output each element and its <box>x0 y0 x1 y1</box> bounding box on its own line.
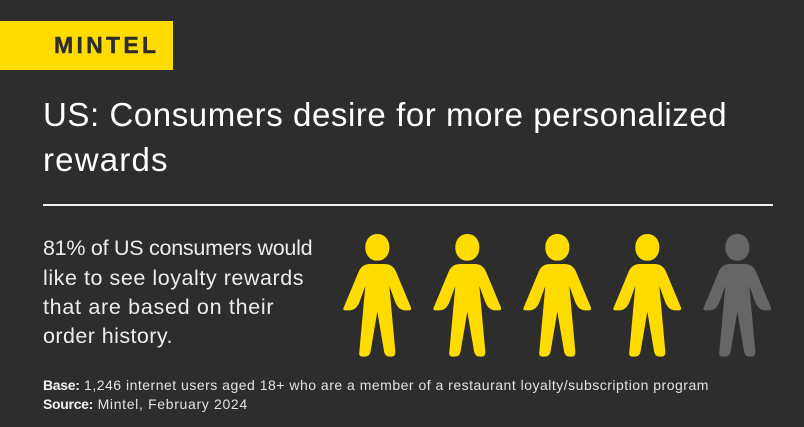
title <box>43 96 727 178</box>
statistic text block: order history. <box>43 324 173 348</box>
title: rewards <box>43 141 169 178</box>
footnote: base and source: Source: Mintel, February 2024 <box>43 396 248 412</box>
statistic text block: like to see loyalty rewards <box>43 266 304 290</box>
statistic text block: that are based on their <box>43 295 274 319</box>
divider line <box>43 204 773 206</box>
icon: person 2 highlighted <box>433 234 501 357</box>
logo wordmark: MINTEL <box>54 32 159 58</box>
icon: person 1 highlighted <box>343 234 411 357</box>
footnote: base and source <box>43 377 709 412</box>
icon: person 5 grey <box>703 234 771 357</box>
footnote: base and source: Base: 1,246 internet users aged 18+ who are a member of a restaurant loyalty/subscription program <box>43 377 709 393</box>
pictogram chart: 4 of 5 people highlighted <box>343 234 772 357</box>
title: US: Consumers desire for more personalized <box>43 96 727 133</box>
logo: Mintel yellow banner <box>0 21 173 70</box>
statistic text block <box>43 236 312 348</box>
statistic text block: 81% of US consumers would <box>43 236 312 260</box>
icon: person 4 highlighted <box>613 234 681 357</box>
icon: person 3 highlighted <box>523 234 591 357</box>
